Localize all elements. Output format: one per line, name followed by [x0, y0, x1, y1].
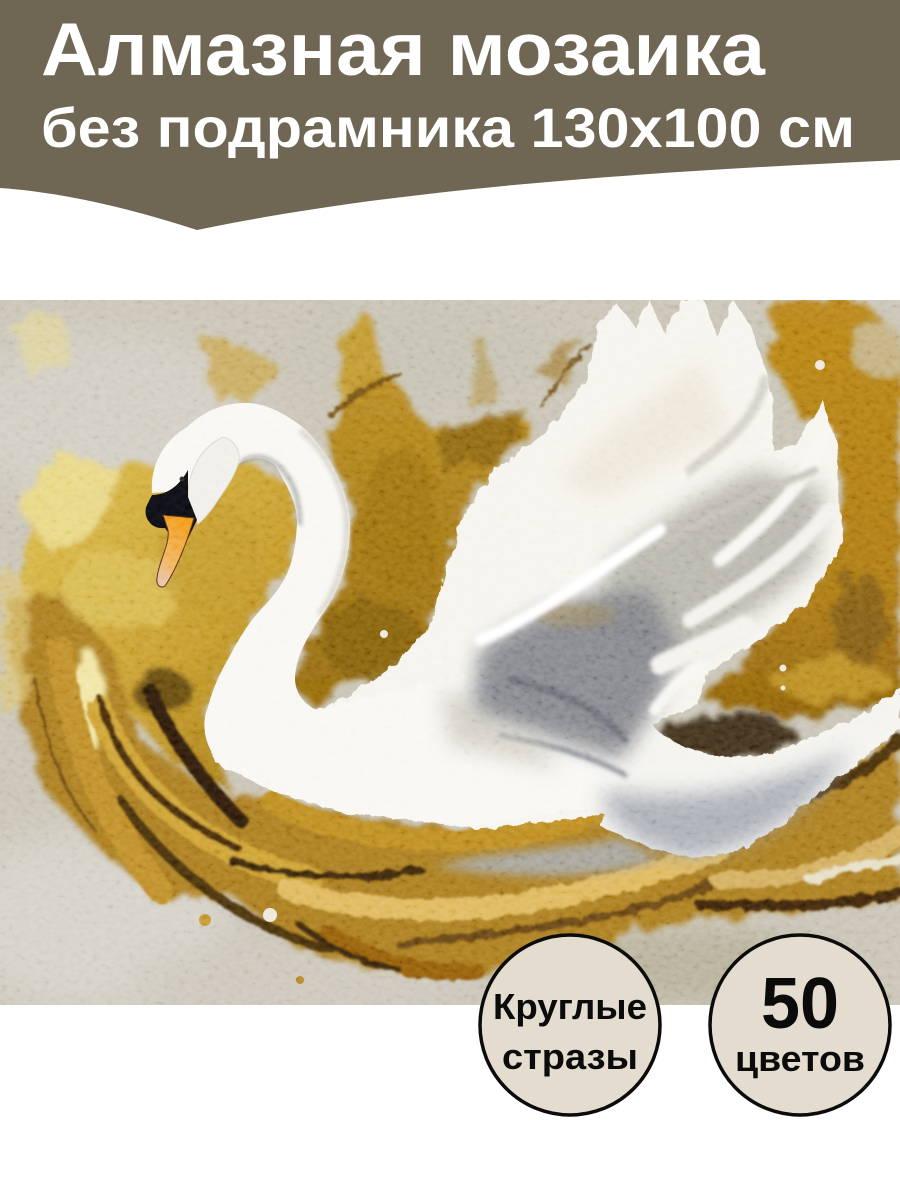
grey gap under body: [435, 838, 660, 876]
swan eye: [180, 476, 184, 482]
badge: round rhinestones: Круглые: [493, 986, 647, 1027]
feather strokes: [480, 380, 830, 775]
wing ochre glaze: [535, 603, 615, 627]
header banner: [0, 0, 900, 230]
badge: round rhinestones: стразы: [502, 1036, 638, 1077]
gold swirl strokes: [35, 345, 900, 973]
swan wing: [316, 300, 843, 830]
wing grey upper feathers: [590, 470, 825, 660]
badge: 50 colours: [710, 935, 890, 1115]
white paint flecks: [199, 360, 825, 984]
swan face mask: [146, 470, 197, 540]
neck outer shading: [300, 430, 347, 615]
swan beak: [157, 515, 194, 587]
swan neck: [152, 403, 350, 780]
swan cheek: [188, 437, 239, 524]
subtitle: без подрамника 130х100 см: [41, 96, 855, 159]
body shadow blend: [440, 690, 560, 770]
badge: 50 colours: цветов: [735, 1038, 865, 1079]
canvas background: [0, 300, 900, 1025]
badge: round rhinestones: [480, 935, 660, 1115]
swan tail: [600, 686, 900, 857]
neck underside shadow: [240, 457, 300, 525]
swan: [146, 300, 900, 984]
painting: golden swan: [0, 300, 900, 1025]
title: Алмазная мозаика: [41, 7, 766, 91]
gold mottling: [60, 320, 900, 759]
paint texture overlay: [0, 300, 900, 1005]
swan body: [211, 708, 416, 822]
wing cream tint: [566, 367, 726, 498]
badge: 50 colours: 50: [761, 964, 839, 1044]
wing dark shadow: [470, 590, 680, 760]
gold splashes: [0, 300, 900, 975]
tail shadow: [600, 750, 850, 858]
